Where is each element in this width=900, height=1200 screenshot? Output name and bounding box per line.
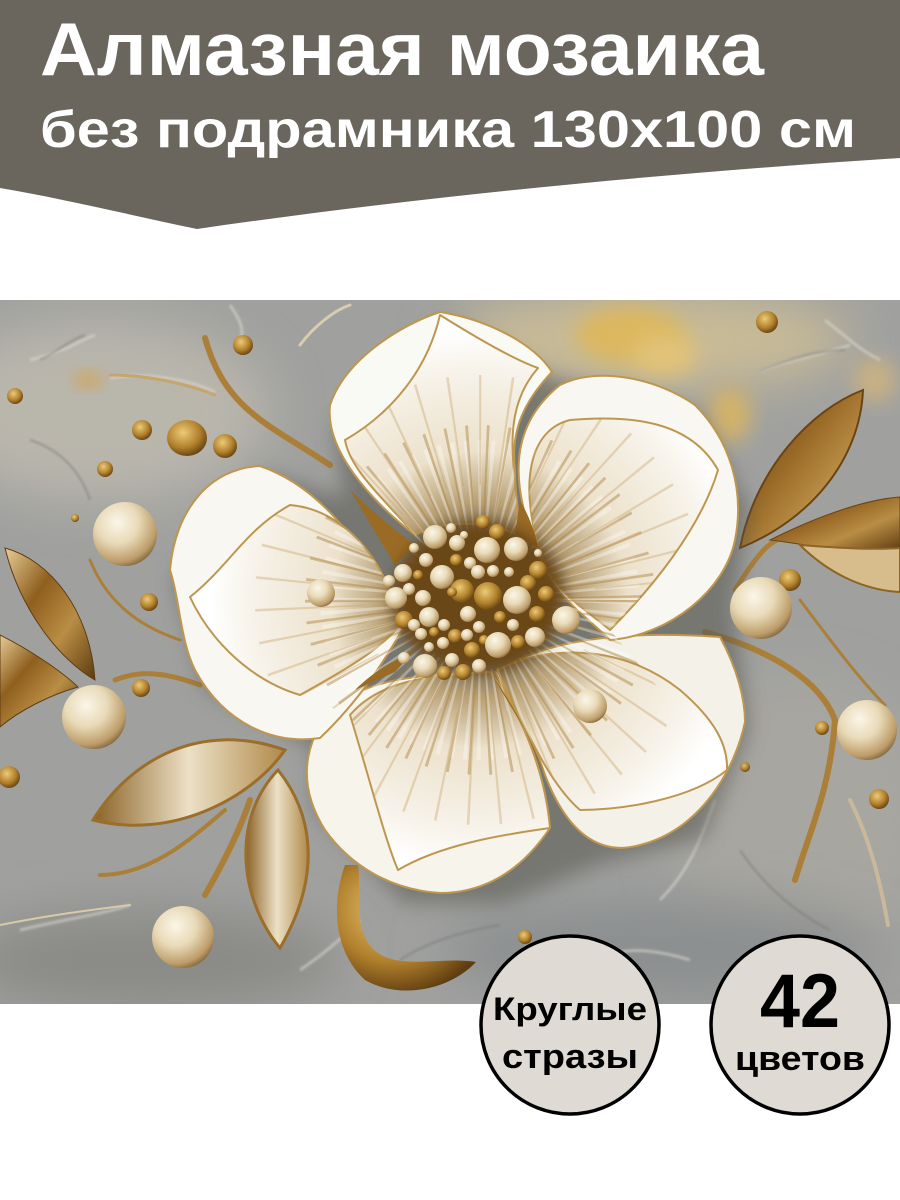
badge: 42 colours: 42: [760, 959, 840, 1044]
canvas texture: [0, 290, 900, 1010]
badge: 42 colours: [711, 936, 889, 1114]
petal: bottom: [307, 672, 550, 893]
pearls: [383, 523, 580, 678]
petal: left: [170, 466, 405, 739]
flower drop shadow: [174, 320, 749, 903]
leaves: right: [740, 390, 900, 592]
artwork: flower painting: [0, 290, 900, 1010]
golden ribbon stem: [337, 865, 476, 990]
gold wedges between petals: [350, 490, 545, 775]
petal radial brush strokes: [310, 430, 650, 770]
pearls on canvas: [62, 502, 897, 968]
flower centre: [383, 515, 580, 680]
badge: 42 colours: цветов: [735, 1040, 865, 1078]
title: Алмазная мозаика: [40, 7, 765, 91]
petal: lower right: [495, 635, 745, 848]
header banner: [0, 0, 900, 229]
flower petals: [170, 312, 745, 893]
badge: round rhinestones: [481, 936, 659, 1114]
petal: right: [519, 376, 738, 640]
gold beads: [395, 515, 554, 680]
petal: top: [330, 312, 552, 535]
gold paint splashes: [0, 311, 889, 944]
stems: [0, 305, 888, 925]
leaves: left: [0, 548, 308, 948]
badge: round rhinestones: Круглые: [493, 991, 647, 1027]
badge: round rhinestones: стразы: [502, 1038, 638, 1076]
subtitle: без подрамника 130х100 см: [40, 101, 856, 159]
